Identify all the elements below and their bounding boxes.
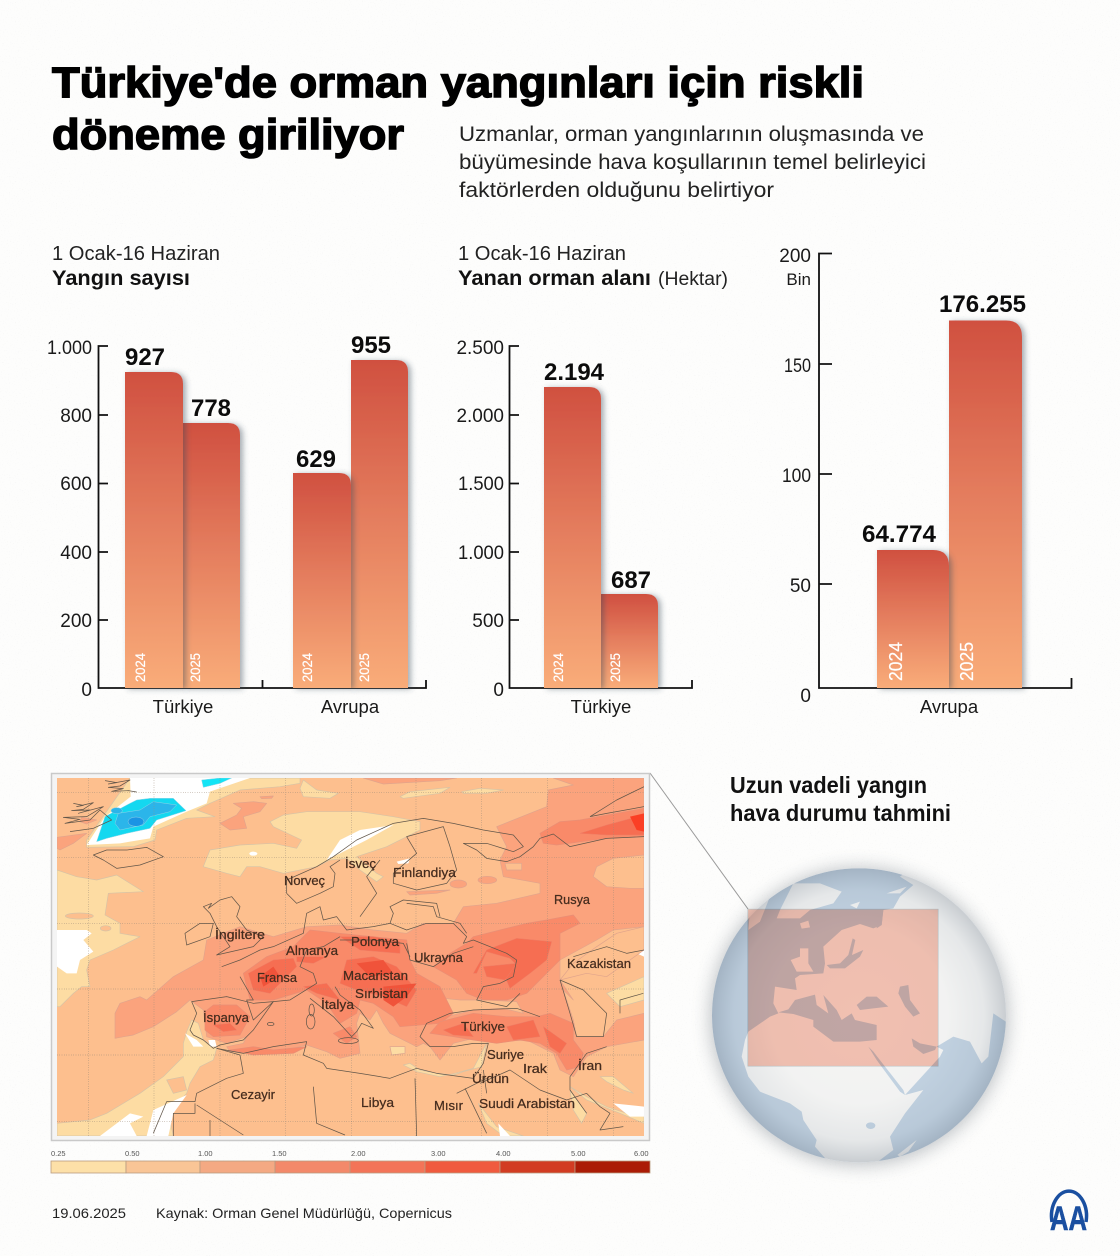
globe heading: Uzun vadeli yangın <box>730 772 927 798</box>
map labels: İngiltere <box>215 927 265 942</box>
cold anomaly patch <box>97 778 232 842</box>
subtitle: büyümesinde hava koşullarının temel belirleyici <box>459 151 926 174</box>
map labels: Rusya <box>554 892 591 907</box>
map labels: Ürdün <box>472 1071 509 1086</box>
map labels: Irak <box>523 1061 548 1076</box>
title: Türkiye'de orman yangınları için riskli <box>52 59 864 107</box>
globe land <box>742 863 1008 1165</box>
year labels: burned area: 2024 <box>550 653 566 682</box>
bar: Türkiye 2024 area <box>544 387 601 688</box>
year labels: burned area: 2025 <box>607 653 623 682</box>
globe heading <box>730 772 951 826</box>
year labels: Avrupa area: 2024 <box>886 642 906 681</box>
legend values: 6.00 <box>634 1149 649 1158</box>
chart heading: fire count: 1 Ocak-16 Haziran <box>52 243 220 265</box>
warm anomaly: level 2 <box>205 808 644 1070</box>
legend values: 1.50 <box>272 1149 287 1158</box>
axis labels: burned area: 1.500 <box>458 474 504 495</box>
value labels: fire count: 629 <box>296 446 336 473</box>
year labels: Avrupa area: 2025 <box>957 642 977 681</box>
value labels: Avrupa area: 64.774 <box>862 521 937 548</box>
value labels: fire count: 955 <box>351 332 391 359</box>
map labels <box>203 856 631 1113</box>
map labels: Ukrayna <box>414 950 464 965</box>
chart: fire count <box>47 332 426 717</box>
chart heading: burned area <box>458 243 728 290</box>
category labels: fire count: Türkiye <box>153 696 213 717</box>
map labels: Finlandiya <box>393 865 457 880</box>
axis labels: fire count <box>47 338 92 701</box>
footer date: 19.06.2025 <box>52 1205 126 1221</box>
legend values: 4.00 <box>496 1149 511 1158</box>
bar: Türkiye 2024 <box>125 372 183 688</box>
subtitle: faktörlerden olduğunu belirtiyor <box>459 179 774 202</box>
year labels: fire count <box>132 653 372 682</box>
map labels: Suriye <box>487 1047 524 1062</box>
axis labels: fire count: 800 <box>60 406 92 427</box>
legend values <box>51 1149 649 1158</box>
globe <box>707 863 1013 1170</box>
legend swatches <box>51 1161 650 1173</box>
value labels: burned area: 687 <box>611 567 651 594</box>
coastlines and borders <box>63 780 644 1136</box>
axis labels: Avrupa area: 0 <box>800 686 811 707</box>
axis labels: burned area: 500 <box>472 611 504 632</box>
icon: agency logo: AA <box>1050 1200 1087 1238</box>
category labels: fire count <box>153 696 380 717</box>
bar: Avrupa 2025 area <box>949 320 1022 688</box>
axis labels: fire count: 600 <box>60 474 92 495</box>
value labels: fire count <box>125 332 391 473</box>
map labels: Norveç <box>284 873 325 888</box>
map labels: Suudi Arabistan <box>479 1096 575 1111</box>
category label: Avrupa area: Avrupa <box>920 696 979 717</box>
grid lines <box>57 778 644 1136</box>
axis labels: burned area <box>456 338 504 701</box>
warm anomaly: level 3 <box>213 815 644 1053</box>
value labels: fire count: 927 <box>125 344 165 371</box>
bar: Avrupa 2024 <box>293 473 351 688</box>
subtitle: Uzmanlar, orman yangınlarının oluşmasında ve <box>459 123 924 146</box>
axis labels: burned area: 2.000 <box>456 406 504 427</box>
map panel <box>52 774 650 1140</box>
axis labels: Avrupa area: 50 <box>790 576 811 597</box>
map labels: İsveç <box>345 856 377 871</box>
map labels: İran <box>578 1058 602 1073</box>
map labels: Sırbistan <box>355 986 408 1001</box>
category labels: fire count: Avrupa <box>321 696 380 717</box>
map labels: Polonya <box>351 934 400 949</box>
bar: Türkiye 2025 <box>183 423 240 688</box>
year labels: fire count: 2025 <box>356 653 372 682</box>
map labels: Macaristan <box>343 968 408 983</box>
axis labels: Avrupa area: 200 <box>779 246 811 267</box>
map labels: Libya <box>361 1095 395 1110</box>
legend values: 1.00 <box>198 1149 213 1158</box>
axis labels: fire count: 400 <box>60 543 92 564</box>
map labels: Almanya <box>286 943 339 958</box>
globe seas <box>778 910 937 1129</box>
year labels: fire count: 2025 <box>187 653 203 682</box>
icon: agency logo <box>1050 1191 1087 1238</box>
chart heading: fire count <box>52 243 220 290</box>
chart heading: burned area: Yanan orman alanı <box>458 267 651 290</box>
chart heading: burned area: 1 Ocak-16 Haziran <box>458 243 626 265</box>
map labels: Türkiye <box>461 1019 505 1034</box>
legend values: 0.25 <box>51 1149 66 1158</box>
bar: Avrupa 2024 area <box>877 550 949 688</box>
weather map <box>57 778 644 1136</box>
map labels: İtalya <box>321 997 355 1012</box>
axis labels: Avrupa area: Bin <box>786 270 811 289</box>
chart: burned area Türkiye <box>456 338 692 717</box>
axis labels: Avrupa area: 150 <box>784 356 811 377</box>
axis labels: fire count: 200 <box>60 611 92 632</box>
year labels: Avrupa area <box>886 642 977 681</box>
map labels: Fransa <box>257 970 298 985</box>
subtitle <box>459 123 926 202</box>
year labels: fire count: 2024 <box>299 653 315 682</box>
category label: burned area: Türkiye <box>571 696 631 717</box>
map labels: Kazakistan <box>567 956 631 971</box>
footer source: Kaynak: Orman Genel Müdürlüğü, Copernicus <box>156 1205 452 1221</box>
year labels: fire count: 2024 <box>132 653 148 682</box>
axis labels: burned area: 1.000 <box>458 543 504 564</box>
axis labels: Avrupa area <box>779 246 811 707</box>
value labels: burned area: 2.194 <box>544 359 605 386</box>
legend values: 0.50 <box>125 1149 140 1158</box>
axis: Avrupa area <box>819 254 1072 688</box>
legend values: 2.00 <box>351 1149 366 1158</box>
year labels: burned area <box>550 653 623 682</box>
base-level holes <box>390 855 644 1055</box>
bar: Avrupa 2025 <box>351 360 408 688</box>
legend values: 3.00 <box>431 1149 446 1158</box>
map labels: Mısır <box>434 1098 464 1113</box>
axis: fire count <box>98 346 426 688</box>
map labels: İspanya <box>203 1010 250 1025</box>
axis labels: fire count: 1.000 <box>47 338 92 359</box>
title: döneme giriliyor <box>52 111 404 159</box>
globe heading: hava durumu tahmini <box>730 800 951 826</box>
axis labels: burned area: 0 <box>493 680 504 701</box>
selected map region <box>748 909 938 1066</box>
value labels: burned area <box>544 359 651 594</box>
legend <box>51 1149 650 1173</box>
axis labels: Avrupa area: 100 <box>782 466 811 487</box>
chart heading: burned area: (Hektar) <box>658 269 728 290</box>
title <box>52 59 864 159</box>
map labels: Cezayir <box>231 1087 276 1102</box>
axis labels: burned area: 2.500 <box>456 338 504 359</box>
legend values: 5.00 <box>571 1149 586 1158</box>
axis labels: fire count: 0 <box>81 680 92 701</box>
chart heading: fire count: Yangın sayısı <box>52 267 190 290</box>
warm anomaly: level 4 <box>260 813 644 1007</box>
warm anomaly: level 1 <box>57 778 644 1077</box>
bar: Türkiye 2025 area <box>601 594 658 688</box>
value labels: Avrupa area: 176.255 <box>939 291 1026 318</box>
chart: burned area Avrupa <box>779 246 1072 717</box>
value labels: fire count: 778 <box>191 395 231 422</box>
value labels: Avrupa area <box>862 291 1026 548</box>
axis: burned area <box>510 346 692 688</box>
callout line <box>650 773 748 909</box>
